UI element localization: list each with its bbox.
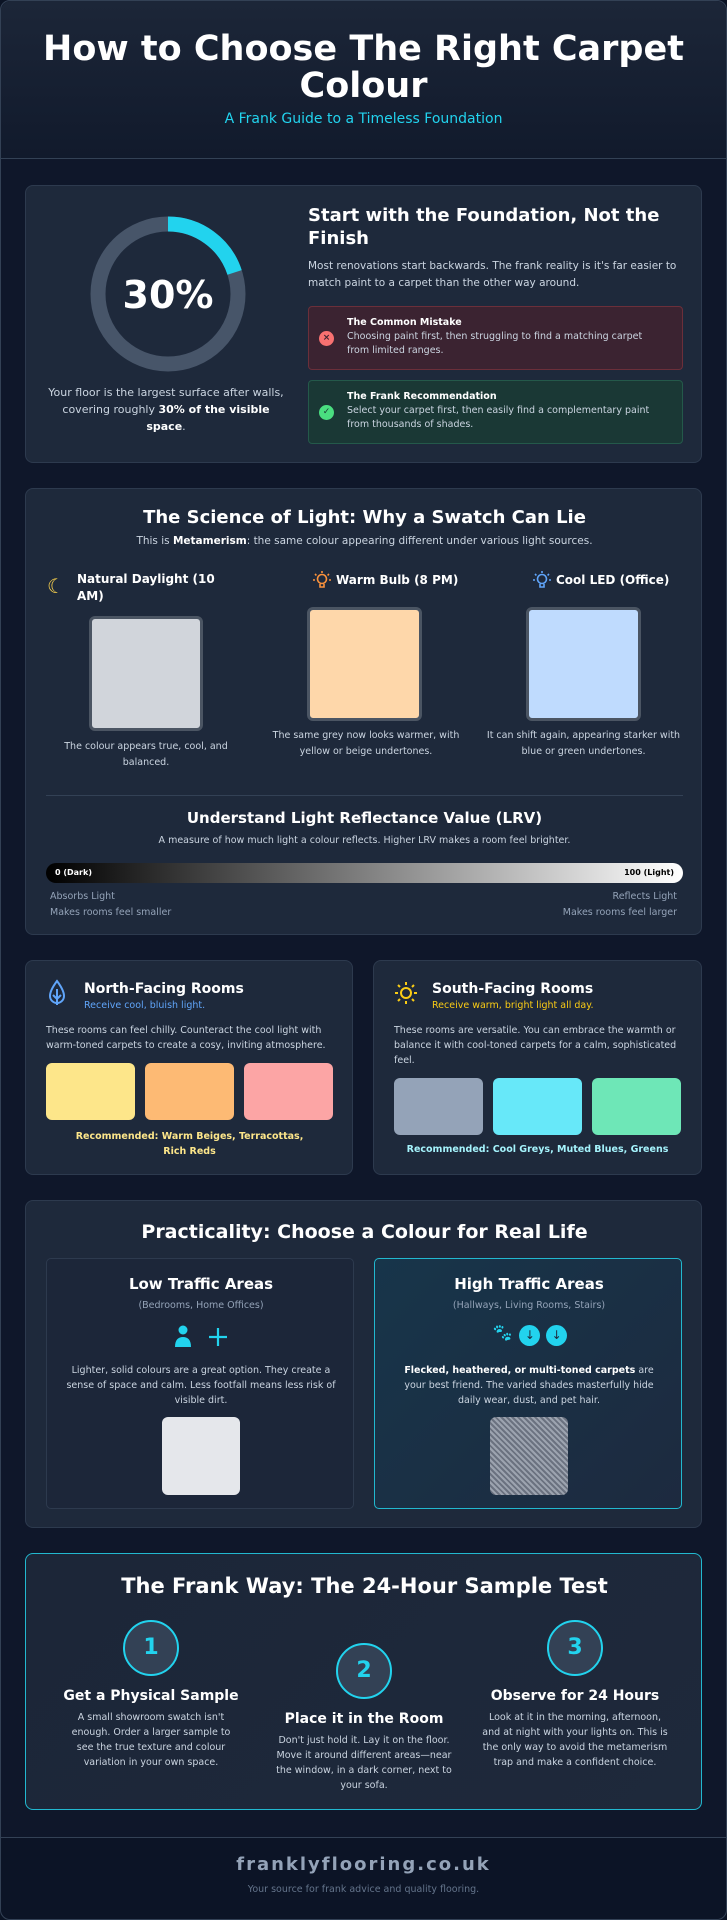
swatch xyxy=(526,607,641,721)
callout: mistake xyxy=(308,306,683,370)
callout: mistake: Choosing paint first, then struggling to find a matching carpet from limited ranges. xyxy=(347,331,642,356)
title: Colour xyxy=(300,66,427,106)
column: cool: It can shift again, appearing starker with blue or green undertones. xyxy=(487,730,680,757)
footer: franklyflooring.co.uk xyxy=(236,1854,491,1875)
swatch xyxy=(307,607,422,721)
card: high traffic: Flecked, heathered, or multi-toned carpets are your best friend. The varied shades masterfully hide daily wear, dust, and pet hair. xyxy=(404,1365,654,1406)
card: low traffic: Lighter, solid colours are a great option. They create a sense of space and calm. Less footfall means less risk of visible dirt. xyxy=(66,1365,336,1406)
column: cool: Cool LED (Office) xyxy=(556,573,669,587)
panel: practicality xyxy=(25,1200,702,1528)
swatch: flecked xyxy=(490,1417,568,1495)
LRV gradient bar: 100 (Light) xyxy=(624,868,674,877)
panel: south-facing xyxy=(373,960,702,1175)
panel: 24-hour test: The Frank Way: The 24-Hour Sample Test xyxy=(121,1574,608,1598)
icon: moon: ☾ xyxy=(47,574,65,598)
icon: x xyxy=(319,331,334,346)
swatch xyxy=(162,1417,240,1495)
icon: check xyxy=(319,405,334,420)
panel: science of light: Reflects Light xyxy=(613,891,677,902)
panel: science of light xyxy=(25,488,702,935)
subtitle: A Frank Guide to a Timeless Foundation xyxy=(225,111,502,127)
step 1: A small showroom swatch isn't enough. Order a larger sample to see the true texture and colour variation in your own space. xyxy=(72,1712,230,1768)
callout: recommendation: Select your carpet first, then easily find a complementary paint from thousands of shades. xyxy=(347,405,649,430)
icon: check: ✓ xyxy=(323,407,330,417)
swatch xyxy=(89,616,203,731)
panel: 24-hour test xyxy=(25,1553,702,1810)
icons: traffic: ↓ xyxy=(552,1328,562,1342)
panel: south-facing: South-Facing Rooms xyxy=(432,981,593,997)
intro text: Most renovations start backwards. The frank reality is it's far easier to match paint to a carpet than the other way around. xyxy=(308,260,676,289)
panel: science of light: Absorbs Light xyxy=(50,891,115,902)
icons: traffic: 🐾︎ xyxy=(491,1323,514,1344)
icon: bulb cool xyxy=(533,571,551,588)
column: cool xyxy=(487,571,680,757)
footer: Your source for frank advice and quality flooring. xyxy=(248,1884,479,1895)
icons: traffic: ↓ xyxy=(525,1328,535,1342)
column: daylight: The colour appears true, cool, and balanced. xyxy=(64,741,228,768)
step 2 xyxy=(276,1643,452,1791)
caption: Your floor is the largest surface after walls, covering roughly 30% of the visible space. xyxy=(48,386,284,433)
LRV gradient bar: 0 (Dark) xyxy=(55,868,92,877)
panel: north-facing xyxy=(25,960,353,1175)
panel: science of light: Makes rooms feel smaller xyxy=(50,907,171,918)
icon: sun xyxy=(395,982,417,1004)
heading: The Science of Light: Why a Swatch Can Lie xyxy=(143,507,586,528)
step 1 xyxy=(63,1620,239,1768)
swatches cool xyxy=(394,1078,483,1135)
panel: science of light: This is Metamerism: the same colour appearing different under various light sources. xyxy=(136,535,593,547)
step 3: Observe for 24 Hours xyxy=(491,1688,659,1704)
panel: south-facing: Recommended: Cool Greys, Muted Blues, Greens xyxy=(407,1144,668,1155)
card: high traffic: High Traffic Areas xyxy=(454,1275,604,1293)
step 2: Place it in the Room xyxy=(285,1711,443,1727)
icons: traffic xyxy=(491,1323,567,1346)
step 3: 3 xyxy=(567,1635,583,1660)
panel: foundation xyxy=(25,185,702,463)
step 2: Don't just hold it. Lay it on the floor. Move it around different areas—near the window, in a dark corner, next to your sofa. xyxy=(276,1735,452,1791)
panel: north-facing: Recommended: Warm Beiges, Terracottas, Rich Reds xyxy=(76,1131,303,1157)
step 1: 1 xyxy=(143,1635,159,1660)
step 1: Get a Physical Sample xyxy=(63,1688,239,1704)
heading: Start with the Foundation, Not the Finish xyxy=(308,205,659,249)
card: low traffic xyxy=(46,1258,354,1509)
panel: practicality: Practicality: Choose a Colour for Real Life xyxy=(141,1221,588,1243)
title: How to Choose The Right Carpet xyxy=(43,29,684,69)
panel: north-facing: North-Facing Rooms xyxy=(84,981,244,997)
panel: south-facing: Receive warm, bright light all day. xyxy=(432,1000,594,1011)
callout: recommendation: The Frank Recommendation xyxy=(347,391,497,402)
column: warm: Warm Bulb (8 PM) xyxy=(336,573,458,587)
column: warm xyxy=(272,571,459,757)
icons: person plus xyxy=(175,1326,227,1347)
footer xyxy=(1,1837,726,1919)
callout: mistake: The Common Mistake xyxy=(347,317,462,328)
icon: compass xyxy=(49,980,65,1005)
donut chart: 30% xyxy=(123,273,213,317)
donut chart xyxy=(90,216,246,372)
LRV gradient bar xyxy=(46,863,683,883)
column: warm: The same grey now looks warmer, with yellow or beige undertones. xyxy=(273,730,459,757)
card: low traffic: (Bedrooms, Home Offices) xyxy=(138,1300,264,1311)
panel: north-facing: These rooms can feel chilly. Counteract the cool light with warm-toned carpets to create a cosy, inviting atmosphere. xyxy=(46,1025,326,1051)
callout: recommendation xyxy=(308,380,683,444)
step 3: Look at it in the morning, afternoon, and at night with your lights on. This is the only way to avoid the metamerism trap and make a confident choice. xyxy=(482,1712,668,1768)
card: low traffic: Low Traffic Areas xyxy=(129,1275,273,1293)
icon: x: × xyxy=(323,333,330,343)
column: daylight xyxy=(47,572,228,768)
card: high traffic xyxy=(374,1258,682,1509)
panel: science of light: Makes rooms feel larger xyxy=(563,907,677,918)
column: daylight: Natural Daylight (10 AM) xyxy=(77,572,215,603)
header xyxy=(1,1,726,159)
step 3 xyxy=(482,1620,668,1768)
panel: south-facing: These rooms are versatile. You can embrace the warmth or balance it with cool-toned carpets for a calm, sophisticated feel. xyxy=(394,1025,676,1066)
heading: LRV: Understand Light Reflectance Value (LRV) xyxy=(187,809,542,827)
swatches warm xyxy=(46,1063,135,1120)
icon: bulb warm xyxy=(313,571,331,588)
panel: science of light: A measure of how much light a colour reflects. Higher LRV makes a room feel brighter. xyxy=(159,835,570,846)
step 2: 2 xyxy=(356,1658,372,1683)
panel: north-facing: Receive cool, bluish light. xyxy=(84,1000,205,1011)
title xyxy=(43,29,684,106)
card: high traffic: (Hallways, Living Rooms, Stairs) xyxy=(453,1300,605,1311)
